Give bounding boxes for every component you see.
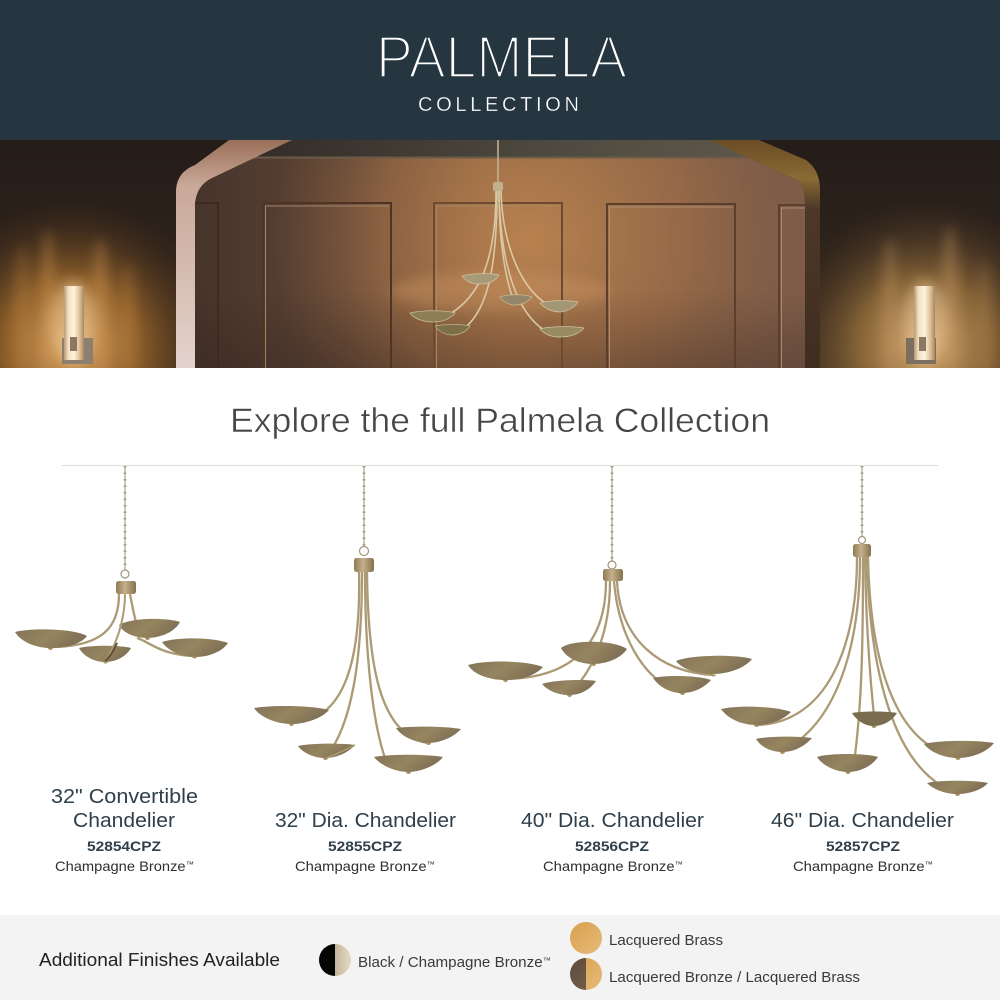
- finish: ™: [427, 860, 435, 869]
- product: 46 inch chandelier: [721, 466, 994, 874]
- chandelier image 52855CPZ: [254, 466, 461, 774]
- arch trim: [176, 140, 820, 368]
- product: 40 inch chandelier: [468, 466, 752, 874]
- finish: Champagne Bronze: [55, 858, 180, 874]
- finish: Champagne Bronze: [295, 858, 420, 874]
- product name: 32" Dia. Chandelier: [275, 810, 456, 832]
- product name: 32" Convertible: [51, 786, 198, 808]
- chandelier image 52857CPZ: [721, 466, 994, 796]
- finish: Champagne Bronze: [793, 858, 918, 874]
- product name: 40" Dia. Chandelier: [521, 810, 704, 832]
- finish label: lacquered bronze / lacquered brass: Lacquered Bronze / Lacquered Brass: [609, 970, 860, 986]
- finish label: black / champagne bronze: ™: [543, 956, 551, 965]
- finish label: lacquered brass: Lacquered Brass: [609, 933, 723, 949]
- product: 32 inch chandelier: [254, 466, 461, 874]
- hero chandelier: [410, 140, 584, 337]
- swatch: lacquered brass: [570, 922, 602, 954]
- arch interior wall: [195, 140, 805, 368]
- title: PALMELA: [376, 24, 628, 90]
- finish: ™: [925, 860, 933, 869]
- footer: additional finishes: [0, 915, 1000, 1000]
- hero photo: room with chandelier and sconces: [0, 140, 1000, 385]
- model number: 52854CPZ: [87, 839, 161, 854]
- swatch: lacquered bronze / lacquered brass: [570, 958, 602, 990]
- finish label: black / champagne bronze: Black / Champagne Bronze: [358, 955, 535, 971]
- swatch: black / champagne bronze: [319, 944, 351, 976]
- header band: [0, 0, 1000, 140]
- section heading: Explore the full Palmela Collection: [230, 402, 770, 440]
- model number: 52855CPZ: [328, 839, 402, 854]
- right wall sconce: [903, 280, 947, 364]
- left wall sconce: [51, 280, 95, 364]
- wall moulding panels: [195, 203, 805, 374]
- chandelier image 52856CPZ: [468, 466, 752, 697]
- finish: ™: [186, 860, 194, 869]
- product name: 46" Dia. Chandelier: [771, 810, 954, 832]
- model number: 52857CPZ: [826, 839, 900, 854]
- footer label: Additional Finishes Available: [39, 950, 280, 970]
- finish: ™: [675, 860, 683, 869]
- subtitle: COLLECTION: [418, 94, 579, 116]
- product: 32 inch convertible chandelier: [15, 466, 228, 874]
- chandelier image 52854CPZ: [15, 466, 228, 664]
- finish: Champagne Bronze: [543, 858, 668, 874]
- model number: 52856CPZ: [575, 839, 649, 854]
- product name: Chandelier: [73, 810, 175, 832]
